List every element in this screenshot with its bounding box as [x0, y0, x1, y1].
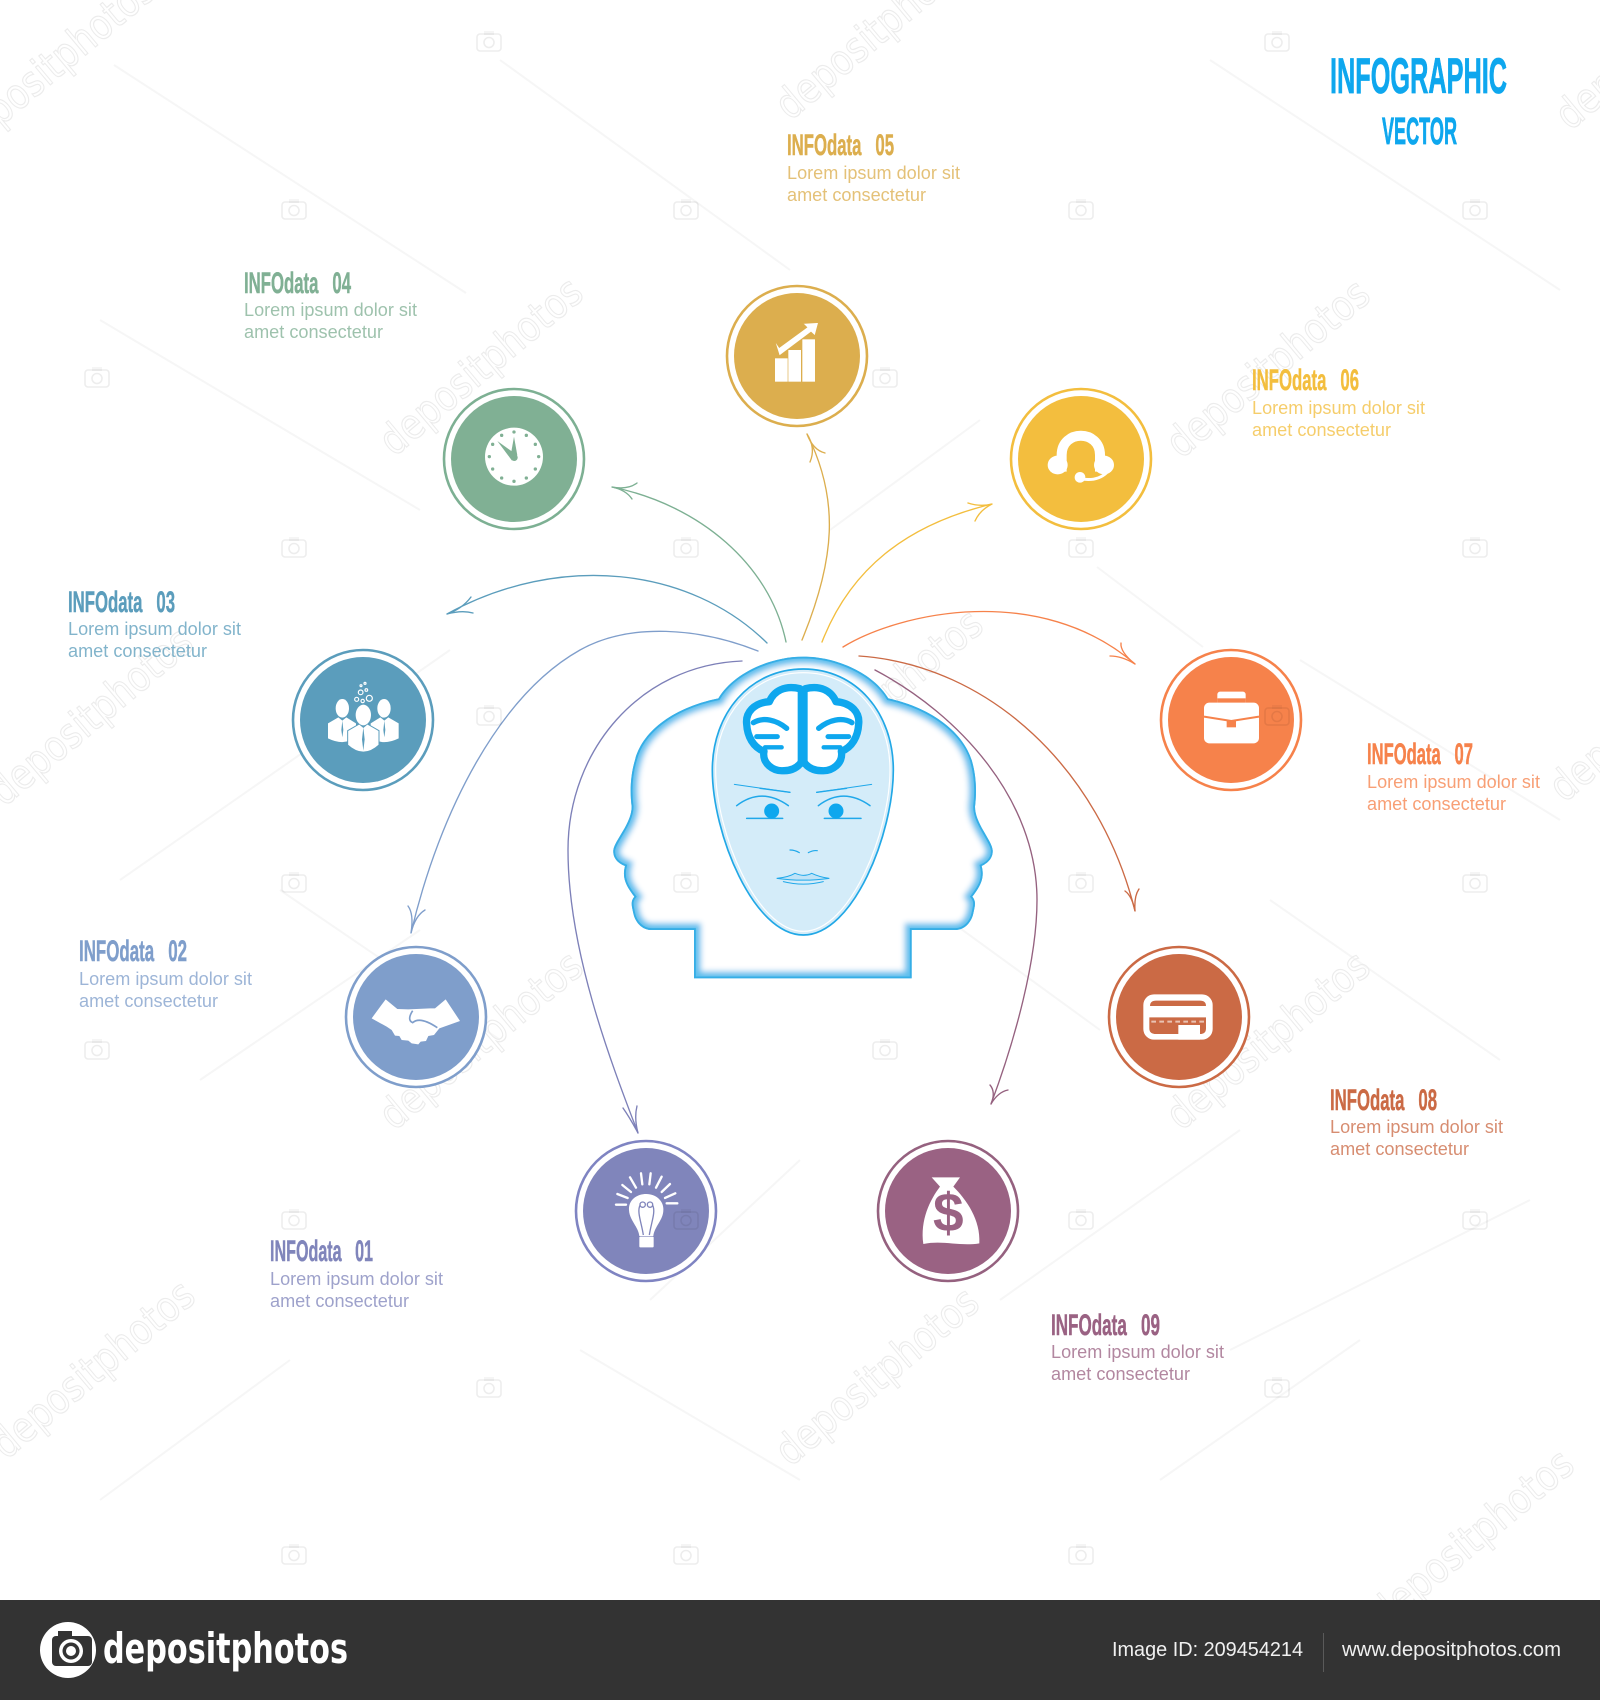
label 04: INFOdata 04	[244, 267, 351, 300]
arrow to 05	[802, 434, 829, 640]
node 01	[576, 1141, 716, 1281]
icon: handshake	[372, 999, 460, 1044]
label 03: INFOdata 03	[68, 586, 175, 619]
node 03	[293, 650, 433, 790]
label 02: amet consectetur	[79, 991, 218, 1011]
arrow to 09	[875, 670, 1037, 1104]
label 08: Lorem ipsum dolor sit	[1330, 1117, 1503, 1137]
node 07	[1161, 650, 1301, 790]
label 05: Lorem ipsum dolor sit	[787, 163, 960, 183]
arrow to 06	[822, 503, 992, 642]
node 08	[1109, 947, 1249, 1087]
icon: rising bar chart	[774, 322, 819, 382]
icon: briefcase	[1204, 692, 1259, 743]
label 03: amet consectetur	[68, 641, 207, 661]
label 02: Lorem ipsum dolor sit	[79, 969, 252, 989]
label 04: Lorem ipsum dolor sit	[244, 300, 417, 320]
label 05	[787, 129, 960, 205]
title: VECTOR	[1382, 111, 1457, 153]
icon: clock	[485, 428, 543, 486]
label 04	[244, 267, 417, 342]
label 06	[1252, 364, 1425, 440]
website: www.depositphotos.com	[1341, 1639, 1561, 1661]
arrow to 08	[859, 656, 1139, 911]
image id: Image ID: 209454214	[1112, 1639, 1303, 1661]
node 09	[878, 1141, 1018, 1281]
node 05	[727, 286, 867, 426]
label 07: Lorem ipsum dolor sit	[1367, 772, 1540, 792]
text: depositphotos	[1156, 269, 1379, 467]
icon: light bulb	[616, 1173, 677, 1247]
label 03: Lorem ipsum dolor sit	[68, 619, 241, 639]
icon: money bag: $	[933, 1182, 964, 1244]
label 06: INFOdata 06	[1252, 364, 1359, 397]
icon: team with gears	[328, 682, 399, 752]
text: depositphotos	[369, 267, 592, 465]
title	[1330, 48, 1507, 153]
label 02: INFOdata 02	[79, 935, 187, 968]
arrow to 01	[568, 661, 742, 1133]
central illustration: heads with face and brain	[613, 657, 993, 978]
label 09: Lorem ipsum dolor sit	[1051, 1342, 1224, 1362]
icon: brain	[747, 688, 859, 771]
label 01: Lorem ipsum dolor sit	[270, 1269, 443, 1289]
face	[712, 669, 893, 935]
label 07	[1367, 738, 1540, 814]
label 06: amet consectetur	[1252, 420, 1391, 440]
arrow to 07	[843, 611, 1135, 664]
label 08	[1330, 1084, 1503, 1159]
text: depositphotos	[369, 941, 592, 1139]
label 04: amet consectetur	[244, 322, 383, 342]
text: depositphotos	[769, 599, 992, 797]
label 09: amet consectetur	[1051, 1364, 1190, 1384]
label 02	[79, 935, 252, 1011]
label 09: INFOdata 09	[1051, 1309, 1160, 1342]
label 03	[68, 586, 241, 661]
label 01: amet consectetur	[270, 1291, 409, 1311]
node 02	[346, 947, 486, 1087]
icon: credit card	[1143, 994, 1213, 1040]
icon: headset	[1048, 436, 1114, 483]
arrow to 02	[408, 631, 758, 933]
arrow to 03	[447, 575, 767, 643]
footer logo: depositphotos	[103, 1624, 348, 1673]
label 06: Lorem ipsum dolor sit	[1252, 398, 1425, 418]
node 06	[1011, 389, 1151, 529]
label 05: amet consectetur	[787, 185, 926, 205]
label 07: INFOdata 07	[1367, 738, 1473, 771]
label 05: INFOdata 05	[787, 129, 894, 162]
text: depositphotos	[765, 1277, 988, 1475]
label 08: INFOdata 08	[1330, 1084, 1437, 1117]
label 01: INFOdata 01	[270, 1235, 373, 1268]
label 07: amet consectetur	[1367, 794, 1506, 814]
footer logo	[40, 1622, 348, 1678]
label 01	[270, 1235, 443, 1311]
footer bar	[0, 1600, 1600, 1700]
node 04	[444, 389, 584, 529]
label 09	[1051, 1309, 1224, 1384]
label 08: amet consectetur	[1330, 1139, 1469, 1159]
text: depositphotos	[1156, 941, 1379, 1139]
arrow to 04	[612, 483, 786, 642]
